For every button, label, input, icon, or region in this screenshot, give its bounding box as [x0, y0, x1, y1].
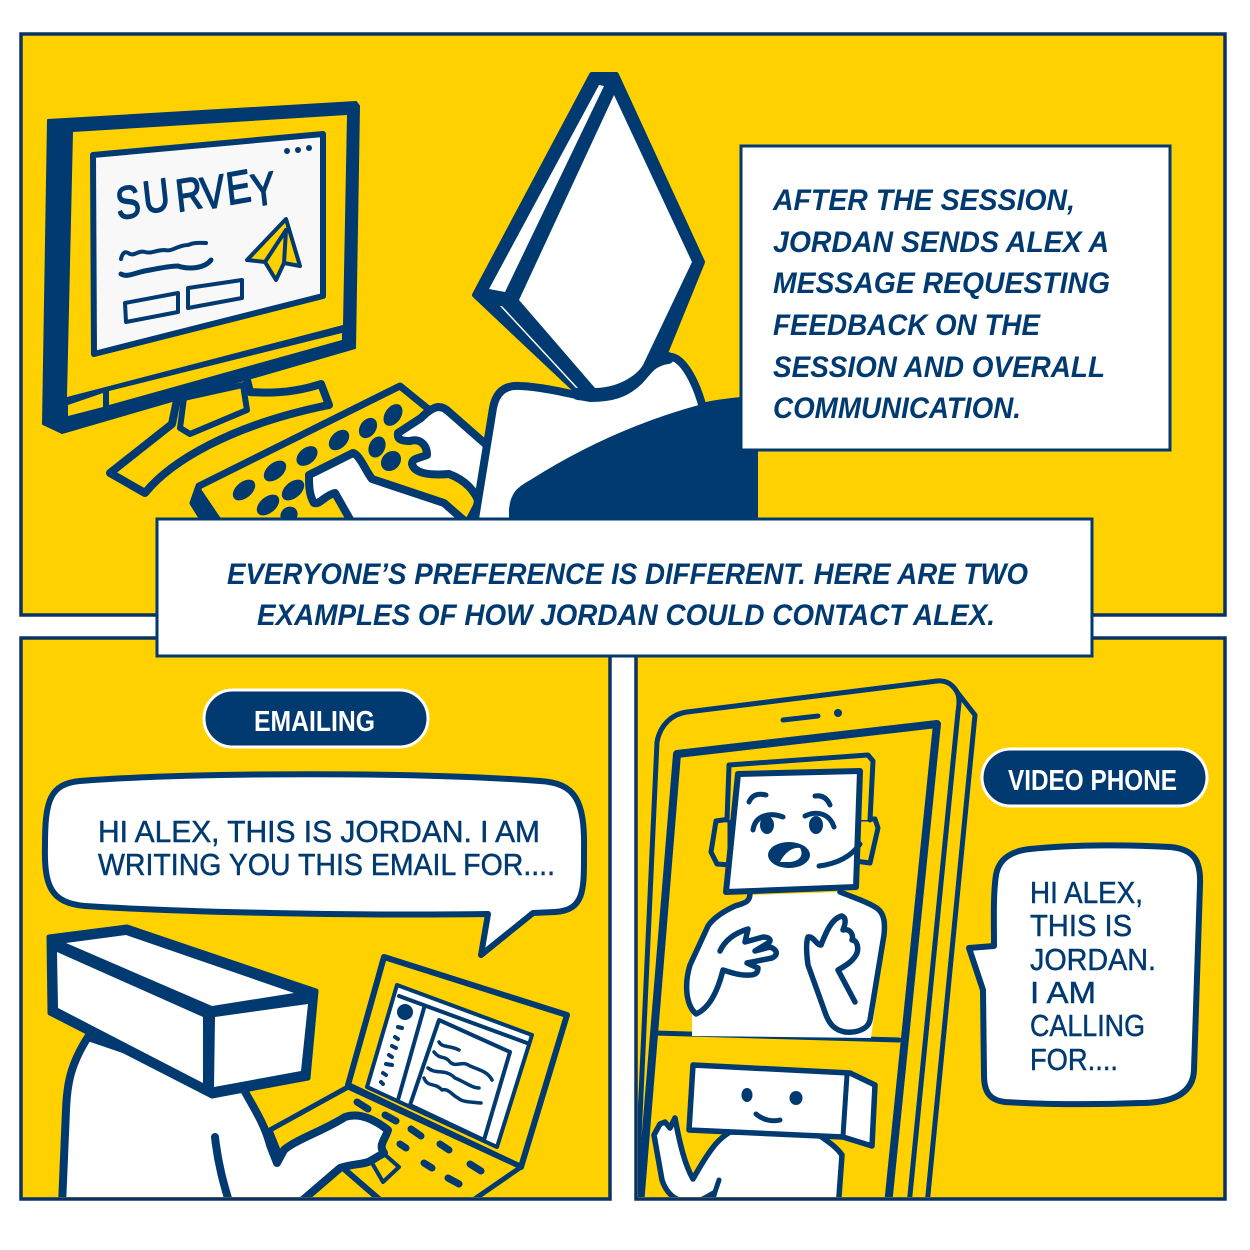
text box: after the session: SESSION AND OVERALL [773, 351, 1105, 384]
speech bubble: phone [969, 845, 1200, 1104]
panel: video phone [636, 638, 1225, 1210]
label: emailing: EMAILING [254, 706, 375, 738]
speech bubble: phone: THIS IS [1030, 908, 1132, 943]
icon: smartphone [636, 681, 975, 1210]
text box: after the session [741, 146, 1170, 450]
panel: top scene [21, 34, 1225, 615]
text box: after the session: AFTER THE SESSION, [772, 184, 1075, 217]
speech bubble: phone: JORDAN. [1030, 942, 1156, 977]
head box [49, 927, 316, 1096]
speech bubble: email: HI ALEX, THIS IS JORDAN. I AM [98, 814, 540, 849]
figure: Jordan on video [686, 755, 885, 1038]
speech bubble: phone: FOR.... [1030, 1042, 1118, 1077]
label: video phone: VIDEO PHONE [1008, 765, 1177, 797]
text box: everyone's preference [157, 519, 1092, 656]
text box: everyone's preference: EVERYONE’S PREFERENCE IS DIFFERENT. HERE ARE TWO [227, 558, 1028, 591]
survey heading: SURVEY [113, 159, 278, 230]
text box: after the session: MESSAGE REQUESTING [773, 267, 1110, 300]
text box: everyone's preference: EXAMPLES OF HOW JORDAN COULD CONTACT ALEX. [257, 599, 995, 632]
speech bubble: phone: I AM [1030, 975, 1096, 1010]
head box [475, 75, 702, 395]
icon: laptop [270, 957, 567, 1205]
icon: keyboard [191, 386, 490, 527]
icon: lower hand on keyboard [309, 453, 475, 530]
icon: desktop monitor [43, 102, 359, 493]
panel: emailing [21, 638, 610, 1205]
text box: after the session: FEEDBACK ON THE [773, 309, 1041, 342]
speech bubble: email [45, 774, 584, 955]
figure: person on laptop [49, 927, 567, 1205]
icon: upper hand on keyboard [398, 407, 495, 505]
text box: after the session: JORDAN SENDS ALEX A [773, 226, 1109, 259]
icon: paper plane [247, 219, 300, 280]
speech bubble: email: WRITING YOU THIS EMAIL FOR.... [98, 847, 555, 882]
label: video phone [982, 749, 1207, 806]
text box: after the session: COMMUNICATION. [773, 392, 1021, 425]
speech bubble: phone: CALLING [1030, 1008, 1145, 1043]
label: emailing [204, 690, 428, 747]
speech bubble: phone: HI ALEX, [1030, 875, 1143, 910]
figure: Alex on video [654, 1065, 875, 1210]
figure: Jordan [474, 75, 758, 525]
